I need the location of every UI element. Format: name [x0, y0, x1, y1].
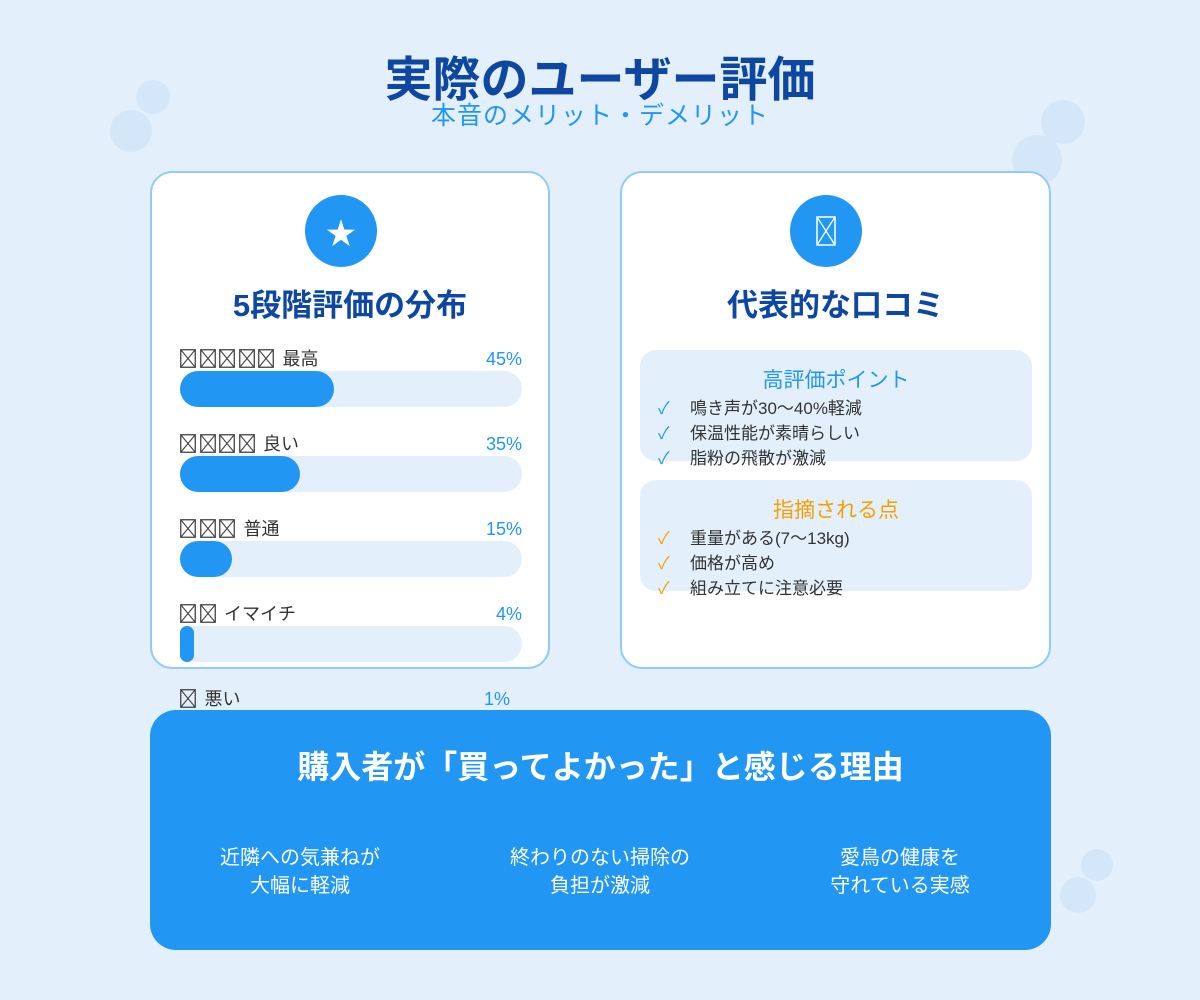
- title: 実際のユーザー評価: [384, 54, 816, 107]
- box: negative points: 組み立てに注意必要: [690, 579, 843, 598]
- row: 5 stars: 最高: [282, 349, 319, 369]
- row: 2 stars: [180, 604, 522, 662]
- heading: distribution: 5段階評価の分布: [233, 288, 467, 323]
- box: positive points: ✓: [658, 424, 670, 443]
- box: positive points: 高評価ポイント: [762, 369, 910, 392]
- heading: reviews: 代表的な口コミ: [727, 288, 944, 323]
- box: negative points: 重量がある(7〜13kg): [690, 529, 850, 548]
- icon: placeholder: [790, 195, 862, 267]
- row: 5 stars: 45%: [486, 349, 522, 369]
- row: 1 star: 悪い: [204, 689, 241, 709]
- row: 2 stars: イマイチ: [224, 604, 296, 624]
- reason 3: [830, 847, 970, 897]
- row: 2 stars: 4%: [496, 604, 522, 624]
- box: positive points: 鳴き声が30〜40%軽減: [690, 399, 862, 418]
- box: negative points: 指摘される点: [773, 499, 899, 522]
- box: positive points: ✓: [658, 399, 670, 418]
- reason 3: 愛鳥の健康を: [840, 847, 960, 869]
- box: negative points: ✓: [658, 529, 670, 548]
- box: positive points: ✓: [658, 449, 670, 468]
- box: positive points: 脂粉の飛散が激減: [690, 449, 826, 468]
- icon: star: ★: [326, 218, 356, 251]
- box: negative points: ✓: [658, 554, 670, 573]
- row: 3 stars: 普通: [244, 519, 280, 539]
- reason 1: 大幅に軽減: [250, 875, 350, 897]
- reason 2: 終わりのない掃除の: [510, 847, 690, 869]
- row: 4 stars: [180, 434, 522, 492]
- row: 3 stars: 15%: [486, 519, 522, 539]
- row: 3 stars: [180, 519, 522, 577]
- row: 4 stars: 35%: [486, 434, 522, 454]
- icon: star: [305, 195, 377, 267]
- box: negative points: 価格が高め: [690, 554, 775, 573]
- panel: reviews: [620, 171, 1051, 669]
- box: positive points: 保温性能が素晴らしい: [690, 424, 860, 443]
- reason 1: 近隣への気兼ねが: [220, 847, 380, 869]
- reason 2: 負担が激減: [550, 875, 650, 897]
- reason 1: [220, 847, 380, 897]
- reason 3: 守れている実感: [830, 875, 970, 897]
- panel: reasons: [150, 710, 1051, 950]
- row: 5 stars: [180, 349, 522, 407]
- subtitle: 本音のメリット・デメリット: [431, 102, 769, 130]
- box: negative points: [640, 480, 1032, 591]
- heading: reasons: 購入者が「買ってよかった」と感じる理由: [297, 749, 904, 785]
- reason 2: [510, 847, 690, 897]
- row: 1 star: 1%: [484, 689, 510, 709]
- panel: rating distribution: [150, 171, 550, 669]
- row: 4 stars: 良い: [263, 434, 299, 454]
- row: 1 star: [180, 689, 510, 709]
- box: positive points: [640, 350, 1032, 461]
- box: negative points: ✓: [658, 579, 670, 598]
